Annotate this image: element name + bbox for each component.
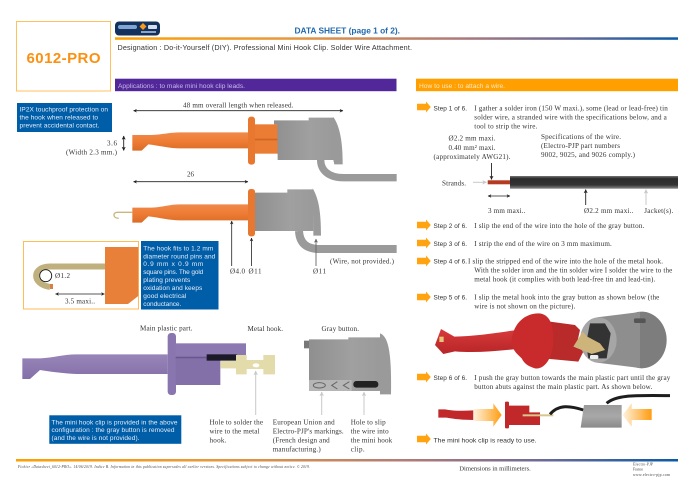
callout: hook fits: plating prevents [143, 277, 191, 284]
step 3 [417, 238, 612, 248]
caption: hole to solder [210, 418, 263, 444]
step 1: I gather a solder iron (150 W maxi.), some (lead or lead-free) tin [474, 104, 668, 112]
caption: hole to slip: clip. [351, 446, 365, 454]
dimension: 3.6 height [66, 136, 124, 156]
part number box: 6012-PRO [26, 50, 101, 67]
step 2: Step 2 of 6. [434, 223, 467, 230]
callout: hook fits: conductance. [143, 301, 181, 308]
caption: hole to slip: the wire into [351, 428, 389, 436]
wire diagram: Ø2.2 mm maxi.. [584, 207, 634, 215]
caption: hole to solder: Hole to solder the [210, 418, 263, 426]
assembly picture with push arrows [438, 395, 670, 428]
caption: hole to solder: wire to the metal [210, 428, 260, 436]
step 5: Step 5 of 6. [434, 294, 467, 302]
step 3: Step 3 of 6. [434, 241, 467, 248]
caption: markings: European Union and [273, 418, 335, 426]
step 6: Step 6 of 6. [434, 375, 467, 382]
callout: hook fits: diameter round pins and [143, 253, 216, 260]
footer: dimensions note: Dimensions in millimeters. [459, 466, 531, 472]
dimension: 48 mm overall length: 48 mm overall length when released. [183, 102, 294, 110]
dimension: 3.6 height: 3.6 [107, 139, 117, 147]
wire diagram: Jacket(s). [644, 207, 674, 215]
footer: file information: Fichier «Datasheet_6012-PRO». 14/06/2019. Indice B. Information in this publication supersedes all earlier versions. Specifications subject to change without notice. © 2019. [17, 464, 310, 469]
step 1: Step 1 of 6. [434, 106, 467, 112]
footer: company: Electro-PJP [633, 462, 653, 466]
red clip and gray button, exploded perspective [435, 312, 667, 368]
wire strand specifications: Ø2.2 mm maxi. [448, 135, 496, 143]
exploded view labels [140, 324, 359, 333]
step 4 [417, 256, 672, 284]
step 5: wire is not shown on the picture). [474, 303, 576, 311]
clip released (orange and gray) [132, 117, 397, 178]
step 4: Step 4 of 6. [434, 258, 467, 266]
wire strand specifications: (approximately AWG21). [434, 153, 511, 161]
callout: IP2X: prevent accidental contact. [20, 123, 100, 130]
caption: markings: manufacturing.) [273, 446, 321, 454]
wire specifications note: Specifications of the wire. [541, 133, 621, 141]
pointer arrows: hole, markings, slip hole [256, 371, 364, 415]
step 1: tool to strip the wire. [474, 123, 538, 131]
caption: markings: Electro-PJP's markings. [273, 428, 344, 436]
exploded view labels: Main plastic part. [140, 324, 193, 332]
callout: hook fits: 0.9 mm x 0.9 mm [143, 261, 203, 268]
panel heading: how to use [416, 79, 678, 91]
caption: hole to slip [351, 418, 393, 454]
step 4: With the solder iron and the tin solder wire I solder the wire to the [474, 267, 672, 275]
panel heading: applications [115, 79, 396, 91]
arrow and label: diameter 4.0: Ø4.0 [230, 268, 245, 276]
exploded view labels: Metal hook. [248, 325, 283, 333]
closing note: ready to use [417, 434, 537, 444]
top rule [115, 37, 678, 40]
callout: IP2X: the hook when released to [20, 115, 98, 122]
panel heading: applications: Applications : to make mini hook clip leads. [118, 83, 245, 90]
arrow and label: diameter 11 flange [248, 238, 262, 276]
step 6 [417, 372, 671, 391]
callout: hook fits: oxidation and keeps [143, 285, 203, 292]
dimension: 26 [134, 170, 248, 182]
bottom rule [16, 459, 678, 462]
step 6: button abuts against the main plastic part. As shown below. [474, 383, 653, 391]
exploded view labels: Gray button. [322, 325, 359, 333]
footer: company: www.electro-pjp.com [633, 473, 670, 477]
inset: hook detail: 3.5 maxi.. [65, 298, 95, 306]
callout: provided configuration: configuration : the gray button is removed [52, 427, 175, 434]
callout: provided configuration: The mini hook clip is provided in the above [52, 419, 178, 426]
part number box [16, 22, 110, 91]
wire diagram: 3 mm maxi.. [488, 207, 526, 215]
dimension: 3.6 height: (Width 2.3 mm.) [66, 148, 118, 156]
step 1 [417, 102, 668, 131]
callout: hook fits: square pins. The gold [143, 269, 204, 276]
wire specifications note: (Electro-PJP part numbers [541, 142, 620, 150]
footer: company: France [633, 468, 643, 472]
designation text: Designation : Do-it-Yourself (DIY). Professional Mini Hook Clip. Solder Wire Attachment. [118, 43, 412, 52]
callout: IP2X [17, 103, 112, 132]
arrow and label: diameter 11 flange: Ø11 [248, 268, 262, 276]
callout: hook fits: The hook fits to 1.2 mm [143, 245, 213, 252]
wire diagram: Strands. [442, 180, 466, 188]
wire strand specifications [434, 135, 511, 161]
step 2: I slip the end of the wire into the hole of the gray button. [474, 222, 645, 230]
gray button [304, 333, 391, 394]
arrow and label: diameter 11 button: Ø11 [313, 268, 326, 276]
caption: markings [273, 418, 344, 454]
callout: provided configuration: (and the wire is not provided). [52, 435, 140, 442]
step 6: I push the gray button towards the main plastic part until the gray [474, 374, 671, 382]
step 1: solder wire, a stranded wire with the specifications below, and a [474, 114, 668, 122]
caption: markings: (French design and [273, 436, 330, 444]
dimension: 26: 26 [187, 170, 194, 178]
wire diagram [442, 163, 678, 215]
step 5: I slip the metal hook into the gray button as shown below (the [474, 294, 659, 302]
clip pushed (orange and gray) with metal hook [114, 188, 397, 249]
wire specifications note [541, 133, 636, 159]
main plastic part (purple) with metal hook [22, 333, 275, 395]
logo [115, 22, 160, 36]
step 5 [417, 292, 659, 311]
step 4: metal hook (it complies with both lead-free tin and lead-tin). [474, 276, 656, 284]
caption: hole to slip: the mini hook [351, 436, 393, 444]
callout: hook fits [141, 241, 218, 310]
callout: provided configuration [49, 415, 181, 444]
wire specifications note: 9002, 9025, and 9026 comply.) [541, 151, 636, 159]
label: wire not provided: (Wire, not provided.) [330, 258, 395, 266]
step 2 [417, 220, 645, 230]
step 4: I slip the stripped end of the wire into the hole of the metal hook. [468, 258, 663, 266]
footer: company [633, 462, 670, 477]
step 3: I strip the end of the wire on 3 mm maximum. [474, 240, 612, 248]
inset: hook detail [24, 242, 138, 309]
caption: hole to solder: hook. [210, 436, 227, 444]
caption: hole to slip: Hole to slip [351, 418, 386, 426]
inset: hook detail: Ø1.2 [55, 272, 70, 280]
closing note: ready to use: The mini hook clip is ready to use. [434, 438, 537, 444]
callout: hook fits: good electrical [143, 293, 187, 300]
arrow and label: diameter 4.0 [230, 221, 245, 276]
panel heading: how to use: How to use : to attach a wire. [419, 83, 505, 90]
callout: IP2X: IP2X touchproof protection on [20, 107, 108, 114]
heading: data sheet: DATA SHEET (page 1 of 2). [294, 26, 400, 36]
arrow and label: diameter 11 button [313, 239, 326, 276]
wire strand specifications: 0.40 mm² maxi. [448, 144, 496, 152]
